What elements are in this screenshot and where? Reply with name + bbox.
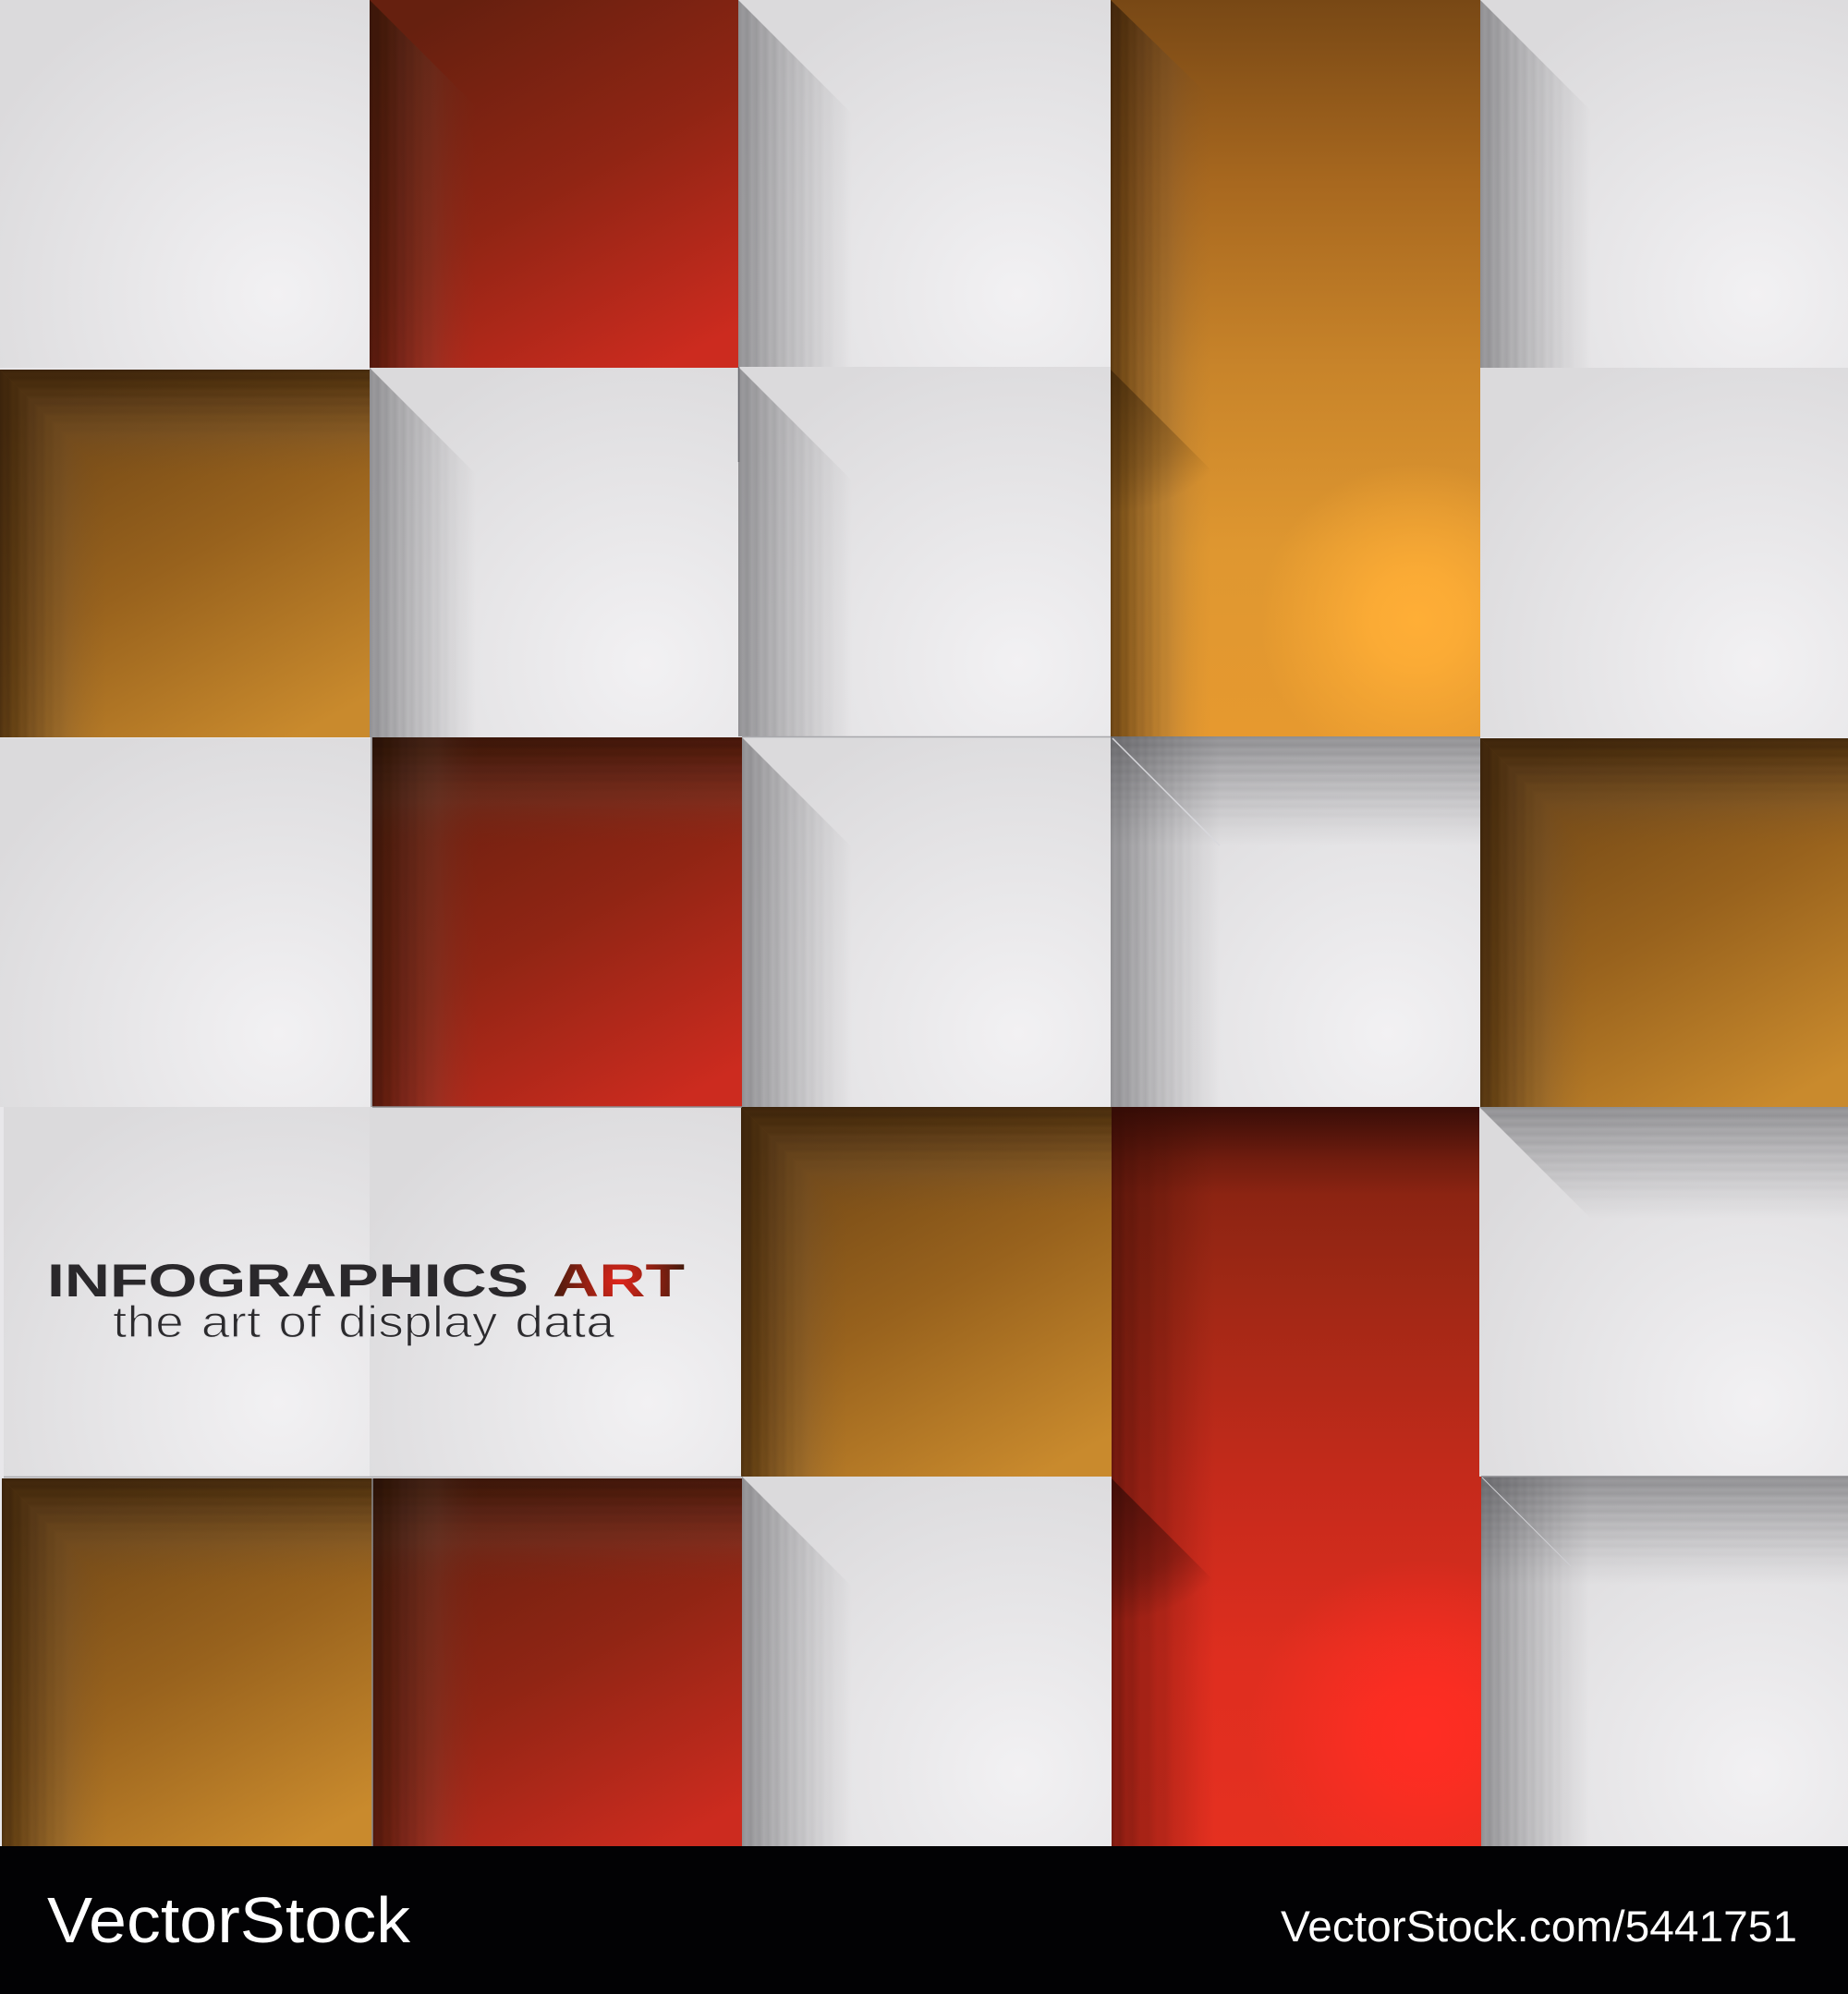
tile: tall orange r1-2c4 (1111, 0, 1480, 736)
tile: orange r2c1 (0, 370, 370, 737)
tile: white r5c3 (742, 1477, 1112, 1846)
tile: orange r5c1 (2, 1478, 372, 1846)
panel: row 5 tiles (2, 1477, 1848, 1846)
heading word: ART: ART (553, 1255, 685, 1307)
tile: white r3c3 (742, 737, 1111, 1107)
panel: row 4 tiles (4, 1107, 1848, 1846)
tile: white r2c3 (738, 367, 1111, 736)
tile: white r2c2 (370, 368, 738, 737)
tile: white r3c4 (1111, 736, 1480, 1107)
panel: row 2 tiles (0, 367, 1848, 737)
footer image id: VectorStock.com/5441751 (1281, 1902, 1797, 1951)
tile: white r1c3 (738, 0, 1111, 368)
title: INFOGRAPHICS ART (47, 1255, 685, 1307)
panel: row 1 tiles (0, 0, 1848, 736)
tile: red r1c2 (370, 0, 738, 368)
tile: red r5c2 (372, 1478, 742, 1846)
tile: orange r3c5 (1480, 738, 1848, 1107)
tile: white r4c5 (1479, 1107, 1848, 1477)
tile: white r2c5 (1480, 368, 1848, 737)
footer brand: VectorStock (47, 1884, 411, 1956)
footer bar (0, 1846, 1848, 1994)
heading word: INFOGRAPHICS: INFOGRAPHICS (47, 1255, 529, 1307)
tile: white r5c5 (1481, 1477, 1848, 1846)
tile: white r4c2 (370, 1107, 741, 1477)
tile: white r4c1 (4, 1107, 370, 1477)
tile: white r1c5 (1480, 0, 1848, 368)
panel: row 3 tiles (0, 736, 1848, 1107)
tile: tall red r4-5c4 (1112, 1107, 1481, 1846)
tile: red r3c2 (372, 737, 742, 1107)
tile: orange r4c3 (741, 1107, 1112, 1477)
subtitle: the art of display data (113, 1298, 614, 1347)
tile: white r1c1 (0, 0, 370, 368)
tile: white r3c1 (0, 738, 371, 1107)
